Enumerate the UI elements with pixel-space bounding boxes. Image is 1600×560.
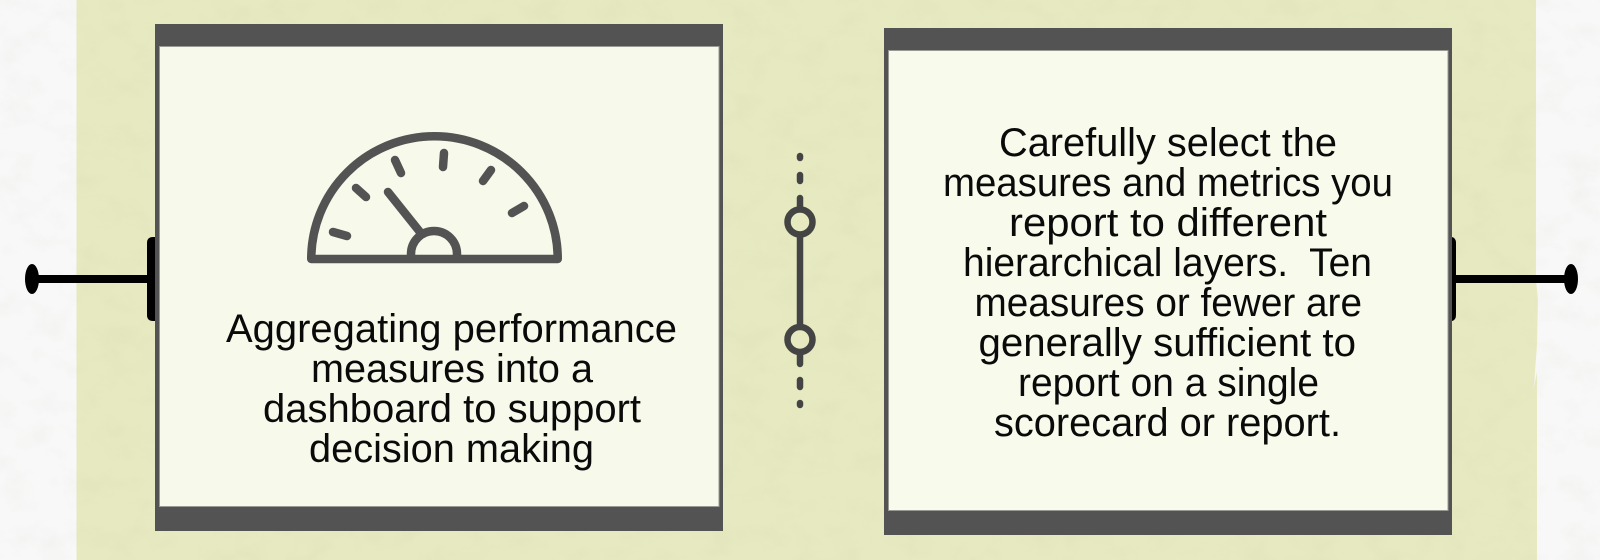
text: dashboard description: measures into a [311,347,594,391]
left connector pin [25,237,155,321]
right connector pin [1452,237,1578,321]
text: measures guidance: generally sufficient to [978,321,1356,365]
text: measures guidance: hierarchical layers. Ten [963,241,1372,285]
text: measures guidance: report on a single [1018,361,1319,405]
text: measures guidance: report to different [1009,201,1327,245]
text: measures guidance: measures and metrics you [943,161,1393,205]
text: measures guidance: measures or fewer are [974,281,1362,325]
text: measures guidance [943,121,1393,445]
text: measures guidance: Carefully select the [999,121,1337,165]
panel: selecting measures [884,28,1452,535]
text: dashboard description [226,307,677,471]
text: dashboard description: decision making [309,427,594,471]
text: dashboard description: Aggregating performance [226,307,677,351]
text: measures guidance: scorecard or report. [994,401,1341,445]
icon: dashboard gauge [311,136,558,259]
panel: dashboard aggregation [155,24,723,531]
center timeline connector [788,156,812,405]
text: dashboard description: dashboard to support [263,387,641,431]
